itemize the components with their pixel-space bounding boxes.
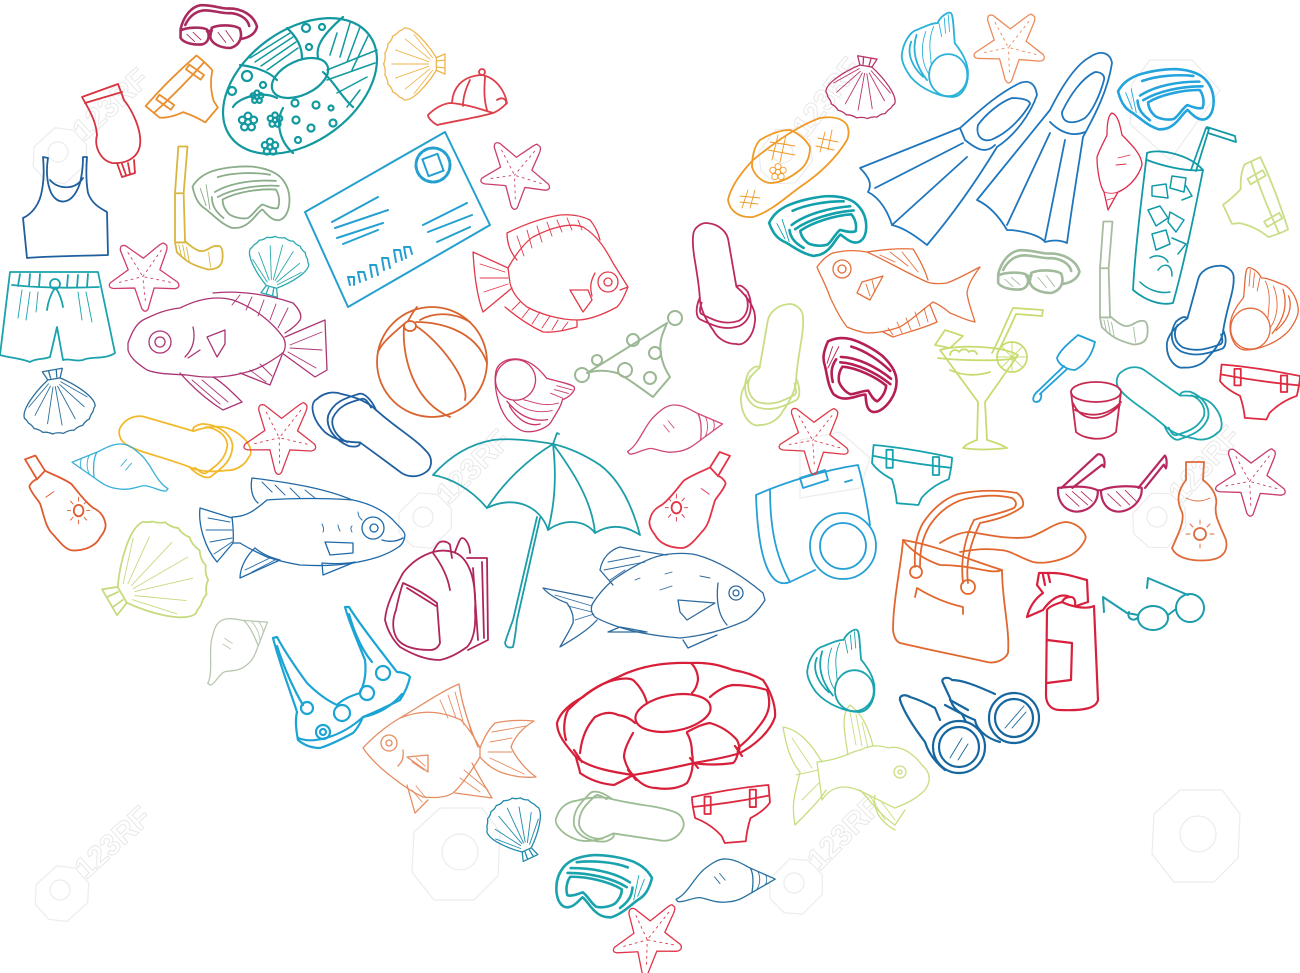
icon: yellow-green briefs	[1209, 156, 1299, 252]
icon: red life ring	[557, 663, 775, 789]
icon: red starfish	[604, 886, 699, 973]
icon: yellow-green fish	[783, 705, 929, 830]
icon: yellow-green scallop shell	[83, 504, 226, 648]
icon: green bikini bottom	[575, 311, 682, 397]
icon: sage flip-flop	[552, 779, 687, 868]
icon: blue scallop shell	[478, 788, 556, 870]
icon: sage goggles	[998, 250, 1080, 293]
icon: light blue whelk shell	[902, 13, 968, 97]
icon: magenta fish	[128, 292, 327, 410]
icon: magenta scallop shell	[822, 51, 902, 124]
icon: orange beach bag	[893, 491, 1086, 663]
icon: blue fish	[200, 478, 405, 578]
icon: yellow-green flip-flop	[741, 304, 803, 425]
watermark logos: 123RF	[1163, 420, 1247, 509]
icon: pale conch	[186, 603, 281, 686]
icon: yellow flip-flop	[115, 387, 257, 494]
icon: navy binoculars	[900, 678, 1039, 773]
icon: blue camera	[756, 465, 876, 583]
icon: sage snorkel	[1100, 222, 1148, 344]
icon: magenta flip-flop	[693, 223, 755, 344]
icon: orange fish	[817, 249, 980, 337]
icon: light blue conch	[72, 444, 168, 491]
icon: blue flip-flop	[304, 370, 437, 503]
icon: red briefs	[1220, 364, 1300, 420]
icon: red discus fish	[473, 215, 628, 332]
icon: teal briefs	[872, 445, 952, 505]
icon: blue toy shovel	[1033, 335, 1095, 402]
icon: blue tank top	[23, 157, 108, 258]
watermark logos: 123RF	[801, 790, 888, 877]
icon: magenta sunglasses	[1058, 454, 1167, 512]
icon: teal swim ring	[198, 0, 402, 182]
icon: teal whelk shell	[807, 630, 874, 712]
icon: orange sun lotion bottle	[25, 456, 106, 550]
icon: crimson whelk shell	[486, 356, 578, 439]
icon: orange goldfish	[363, 684, 536, 813]
icon: navy conch	[676, 856, 776, 907]
icon: orange lotion bottle	[1172, 462, 1226, 560]
icon: red starfish	[233, 382, 333, 483]
icon: red spray bottle	[1027, 573, 1098, 710]
icon: teal mask	[766, 191, 870, 261]
icon: iced drink glass	[1133, 127, 1236, 304]
icon: yellow snorkel	[175, 146, 223, 270]
watermark logos: 123RF	[67, 62, 156, 147]
icon: beach ball	[377, 307, 487, 417]
icon: teal flip-flop	[1112, 343, 1229, 460]
icon: teal bikini top	[273, 607, 410, 748]
icon: red cone shell	[1097, 113, 1142, 210]
icon: magenta backpack	[385, 538, 488, 660]
icon: teal swim shorts	[0, 272, 115, 362]
icon: blue-grey scallop shell	[17, 364, 99, 440]
icon: magenta goggles	[181, 5, 257, 48]
icon: red lotion bottle	[649, 452, 730, 548]
icon: magenta starfish	[1205, 429, 1300, 525]
icon: orange sun hat	[728, 117, 849, 217]
icon: teal sunglasses	[1103, 578, 1204, 630]
icon: teal umbrella	[433, 433, 640, 648]
icon: cocktail glass	[935, 308, 1043, 450]
icon: light blue mask	[1117, 67, 1215, 131]
icon: red lotion tube	[82, 84, 140, 177]
watermark logos: 123RF	[69, 800, 158, 885]
icon: red briefs	[692, 785, 770, 843]
icon: blue flip-flop	[1165, 262, 1235, 371]
icon: red cap	[428, 69, 507, 125]
icon: pink conch	[628, 405, 722, 454]
watermark logos: 123RF	[430, 424, 517, 511]
icon: orange bikini bottom	[145, 48, 235, 142]
icon: yellow scallop shell	[384, 28, 445, 100]
icon: magenta mask	[805, 325, 909, 423]
icon: blue swim fins	[860, 53, 1112, 245]
icon: postcard	[305, 132, 490, 307]
icon: teal scallop shell	[240, 230, 314, 303]
icon: orange whelk shell	[1230, 268, 1298, 350]
icon: magenta starfish	[470, 123, 566, 218]
icon: pink starfish	[98, 224, 194, 319]
icon: teal mask	[555, 853, 653, 919]
icon: green diving mask	[192, 166, 290, 228]
icon: red starfish	[769, 388, 864, 483]
icon: navy fish	[543, 547, 765, 648]
icon: orange starfish	[963, 0, 1061, 91]
icon: red bucket	[1071, 382, 1121, 439]
watermark logos: 123RF	[786, 52, 868, 143]
